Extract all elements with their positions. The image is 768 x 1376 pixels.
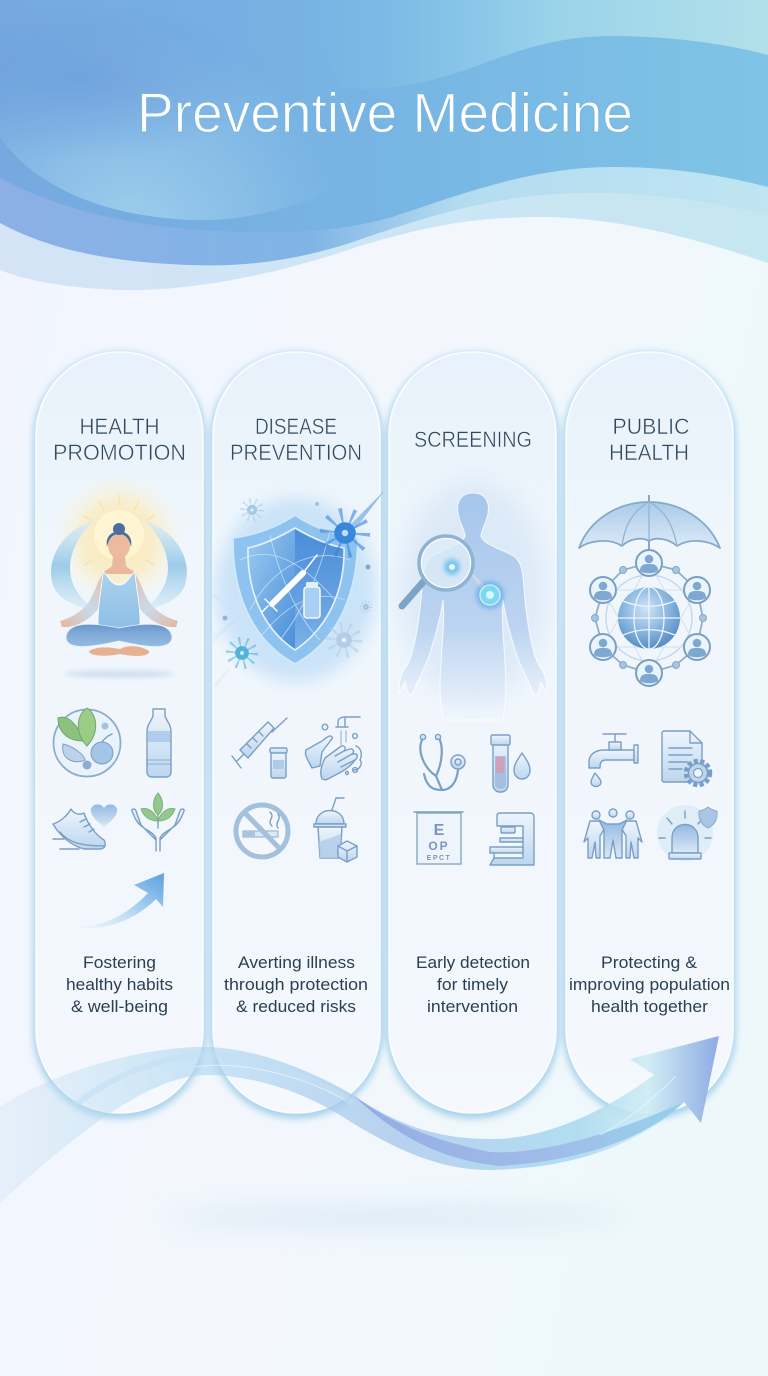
icon: eye chart: EPCT — [427, 855, 451, 862]
icon: hand washing — [305, 717, 361, 780]
header wave banner — [0, 0, 768, 290]
description: public health: Protecting & — [601, 953, 698, 972]
description: public health: improving population — [569, 975, 730, 994]
icon: hands holding sprout — [132, 793, 184, 851]
heading: health promotion: PROMOTION — [53, 440, 186, 465]
description: health promotion: Fostering — [83, 953, 156, 972]
icon: plate of healthy food — [54, 708, 120, 776]
description: disease prevention: Averting illness — [238, 953, 355, 972]
icon: eye chart: E — [434, 822, 445, 839]
description: public health: health together — [591, 997, 708, 1016]
description: disease prevention: through protection — [224, 975, 368, 994]
icon: stethoscope — [420, 734, 465, 790]
icon: eye chart — [414, 812, 463, 864]
icon: meditating figure — [51, 474, 187, 678]
description: health promotion: & well-being — [71, 997, 168, 1016]
icon: water tap — [589, 734, 638, 786]
heading: public health: PUBLIC — [612, 414, 690, 439]
icon: protective shield with syringe and viruses — [204, 490, 385, 688]
arrow: upward growth — [75, 873, 164, 928]
heading: screening: SCREENING — [414, 427, 532, 452]
icon: alert beacon and shield — [657, 805, 717, 861]
icon: sugary drink and sugar cube — [314, 798, 357, 862]
heading: health promotion: HEALTH — [80, 414, 160, 439]
description: screening: for timely — [437, 975, 509, 994]
icon: running shoe and heart — [53, 804, 117, 849]
icon: no smoking — [236, 805, 288, 857]
icon: blood test tube and drop — [491, 735, 530, 792]
panel: public health — [566, 352, 733, 1113]
description: health promotion: healthy habits — [66, 975, 173, 994]
title: Preventive Medicine — [137, 81, 633, 144]
icon: mammography machine — [490, 813, 534, 865]
panel: disease prevention — [204, 352, 385, 1113]
panel shadows — [33, 352, 736, 1119]
panel: health promotion — [36, 352, 203, 1113]
description: screening: intervention — [427, 997, 518, 1016]
heading: disease prevention: DISEASE — [255, 414, 337, 439]
icon: syringe and vial — [232, 718, 287, 778]
icon: policy document and gear — [662, 731, 710, 785]
icon: community group — [584, 809, 642, 858]
icon: eye chart: OP — [428, 839, 450, 853]
icon: water bottle — [147, 709, 171, 777]
description: disease prevention: & reduced risks — [236, 997, 356, 1016]
panel: screening — [389, 352, 556, 1113]
icon: umbrella over community network and globe — [579, 495, 720, 686]
shadow under progress arrow — [165, 1209, 625, 1225]
heading: disease prevention: PREVENTION — [230, 440, 362, 465]
description: screening: Early detection — [416, 953, 530, 972]
icon: body scan with magnifier — [399, 480, 547, 720]
heading: public health: HEALTH — [609, 440, 689, 465]
arrow: progress swoosh — [0, 1036, 719, 1203]
